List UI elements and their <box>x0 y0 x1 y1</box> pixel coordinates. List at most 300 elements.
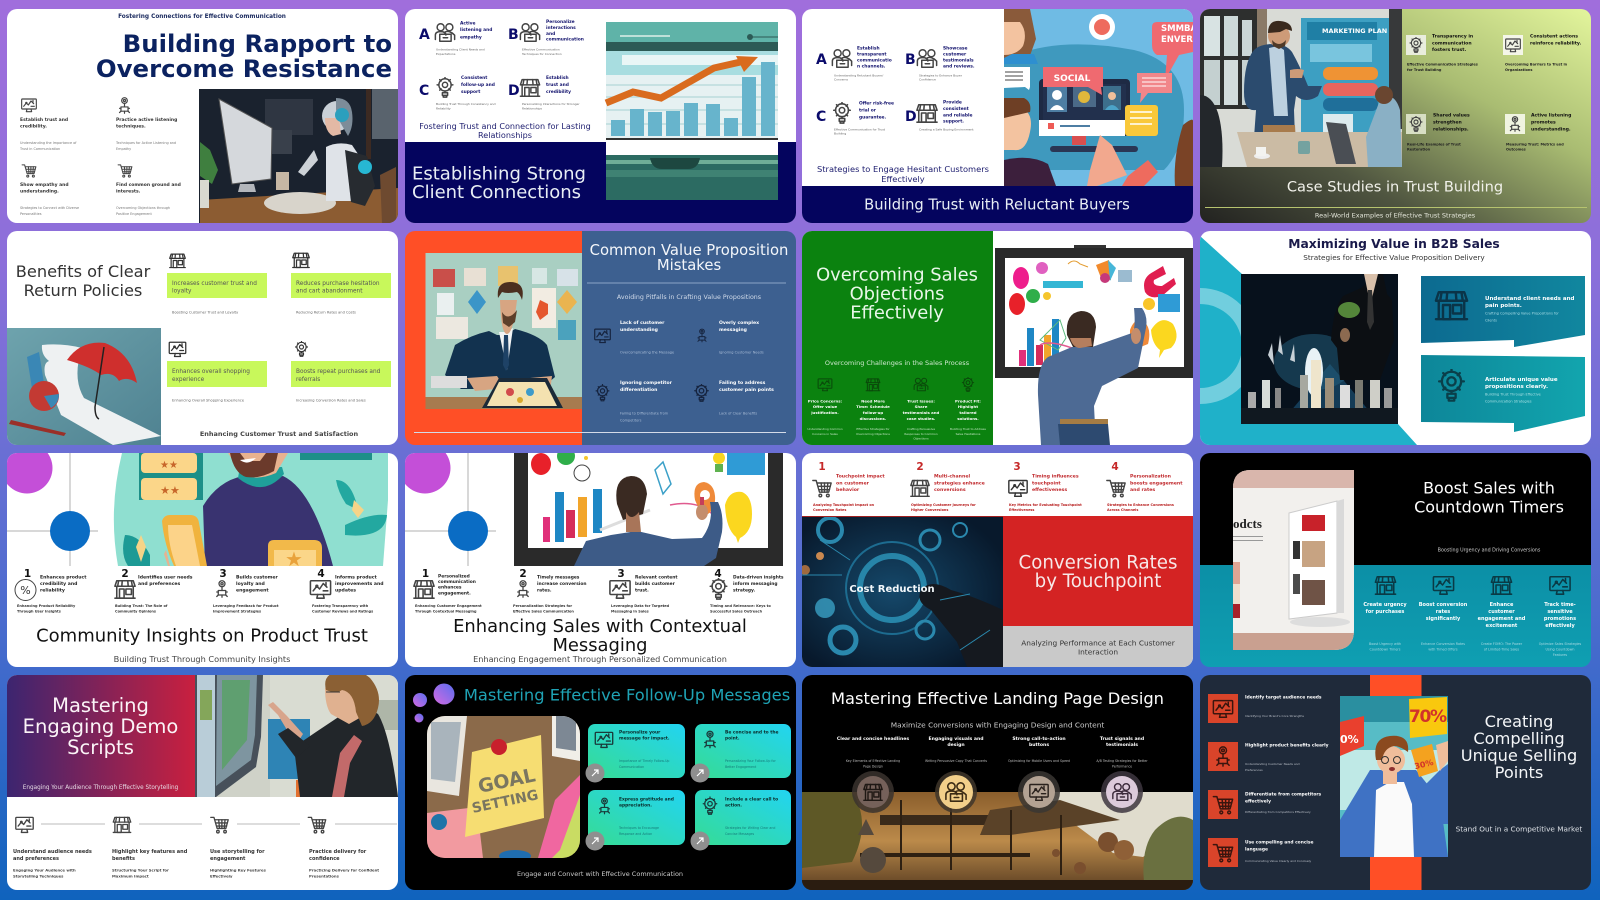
column: trust signals: Performance <box>1112 764 1132 768</box>
image: goal setting note on cork board: SETTING <box>471 787 540 817</box>
image: goal setting note on cork board: GOAL <box>476 764 537 798</box>
icon: people <box>914 378 928 391</box>
item 4: Successful Sales Outreach <box>710 610 763 614</box>
item C: C <box>816 109 826 125</box>
item: trust and loyalty: loyalty <box>172 288 192 294</box>
image: man at whiteboard <box>514 447 783 566</box>
item: understand client needs: Clients <box>1485 318 1497 322</box>
item 2: Higher Conversions <box>911 508 948 512</box>
item: active listening <box>1505 112 1571 152</box>
item: key features: benefits <box>112 856 135 862</box>
item: price concerns: Understanding Common <box>807 427 843 431</box>
item 3: 3 <box>617 568 625 580</box>
item: more time: Need More <box>861 398 885 404</box>
title: Objections <box>850 284 944 304</box>
item: key features: Maximum Impact <box>112 874 149 878</box>
item: show empathy: Show empathy and <box>20 182 69 188</box>
item 1: Analyzing Touchpoint Impact on <box>813 503 875 507</box>
item: price concerns <box>807 379 843 436</box>
icon: cart <box>211 817 228 833</box>
item D <box>508 75 580 110</box>
item C: trial or <box>859 108 877 114</box>
title: Effectively <box>850 302 944 324</box>
item 4: Timing and Relevance: Keys to <box>710 604 771 608</box>
item 3: loyalty and <box>236 581 265 587</box>
title: Return Policies <box>24 281 142 300</box>
item: conversion: Enhance Conversion Rates <box>1421 642 1465 646</box>
icon: gear <box>596 384 609 401</box>
item: reduces hesitation <box>291 253 391 314</box>
item: product fit: Product Fit: <box>955 398 981 404</box>
item 1: 1 <box>818 461 826 473</box>
item: urgency: Create urgency <box>1363 602 1407 608</box>
icon: monitor <box>16 817 33 832</box>
item 2: 2 <box>916 461 924 473</box>
item: understand client needs: Understand client needs and <box>1485 296 1574 302</box>
item A: communicatio <box>857 58 892 64</box>
item: trust issues: Trust Issues: <box>907 398 935 404</box>
item: promotions <box>1539 577 1582 657</box>
image: customer with rating cards <box>114 453 388 571</box>
item: customer understanding: Overcomplicating the Message <box>620 350 674 354</box>
item: understand client needs <box>1421 276 1585 347</box>
title: Building Rapport to <box>123 29 392 58</box>
item A: Understanding Reluctant Buyers' <box>834 74 884 78</box>
item: delivery <box>308 817 397 878</box>
icon: cart <box>118 165 132 177</box>
icon: store <box>170 254 185 268</box>
icon: store badge <box>852 771 894 813</box>
item: reduces hesitation: Reduces purchase hesitation <box>296 281 380 287</box>
item 2: Identifies user needs <box>138 574 193 580</box>
item: trust issues <box>903 378 940 440</box>
item 3: effectiveness <box>1032 487 1067 493</box>
icon: pin <box>600 798 609 814</box>
item B: Showcase <box>943 46 968 52</box>
subtitle: Enhancing Engagement Through Personalized Communication <box>473 654 727 664</box>
item: price concerns: Offer value <box>813 404 837 409</box>
title: Establishing Strong <box>412 164 586 184</box>
icon: store <box>293 253 309 268</box>
title: Compelling <box>1473 729 1565 748</box>
subtitle: Interaction <box>1078 648 1118 656</box>
item: storytelling: Highlighting Key Features <box>210 868 267 872</box>
item: establish trust: credibility. <box>20 124 47 130</box>
panel: Creating Compelling Unique Selling Points <box>1200 675 1591 890</box>
item 1: behavior <box>836 487 860 493</box>
item: customer understanding <box>595 320 674 354</box>
item: trust issues: Share <box>915 404 928 409</box>
item D: support. <box>943 118 964 124</box>
item B <box>905 46 975 82</box>
item: trust and loyalty: Increases customer trust and <box>172 281 257 287</box>
item: consistent actions <box>1503 34 1581 72</box>
card: call to action: Strategies for Writing Clear and <box>725 826 775 830</box>
icon: store <box>414 581 434 598</box>
title: Common Value Proposition <box>590 242 788 259</box>
item: price concerns: Concerns in Sales <box>812 432 838 436</box>
item D: credibility <box>546 89 571 95</box>
title: Enhancing Sales with Contextual <box>453 616 747 637</box>
item: trust issues: Objections <box>913 436 929 440</box>
image: social media illustration: ENVER <box>1161 35 1193 45</box>
item: transparency: for Trust Building <box>1407 68 1442 72</box>
item: articulate unique value: propositions clearly. <box>1485 384 1548 390</box>
item: product fit: Sales Hesitations <box>956 432 981 436</box>
title: Conversion Rates <box>1019 552 1177 574</box>
item 3: Key Metrics for Evaluating Touchpoint <box>1009 503 1082 507</box>
item: consistent actions: Consistent actions <box>1530 34 1578 40</box>
panel: Enhancing Sales with Contextual Messaging <box>400 442 796 667</box>
item: differentiation: Ignoring competitor <box>620 380 673 386</box>
item 1: Enhancing Customer Engagement <box>415 604 482 608</box>
card: gratitude: Express gratitude and <box>619 796 674 802</box>
arrow button <box>586 764 604 782</box>
item: target audience: Identify target audience needs <box>1245 694 1322 700</box>
item: audience needs <box>13 817 105 878</box>
column: headlines: Clear and concise headlines <box>837 736 909 742</box>
item 3: trust. <box>635 588 649 594</box>
card: personalize: Communication <box>619 765 644 769</box>
item: more time: Overcoming Objections <box>856 432 890 436</box>
item: common ground: interests. <box>116 188 141 194</box>
icon: pin <box>217 581 227 597</box>
item: differentiate <box>1208 790 1322 819</box>
item: compelling language: Use compelling and concise <box>1245 840 1314 846</box>
card: gratitude: Techniques to Encourage <box>618 826 659 830</box>
item: differentiation: Failing to Differentiate from <box>620 412 669 416</box>
item: active listening: Active listening <box>1531 112 1571 118</box>
item: reduces hesitation: Reducing Return Rates and Costs <box>296 310 356 314</box>
item 4: Strategies to Enhance Conversions <box>1107 503 1174 507</box>
item: engagement: engagement and <box>1478 616 1526 622</box>
item: show empathy: Personalities <box>20 212 42 216</box>
card: personalize: Importance of Timely Follow-Up <box>619 759 669 763</box>
subtitle: Maximize Conversions with Engaging Design and Content <box>891 720 1104 730</box>
column: trust signals <box>1096 736 1148 813</box>
subtitle: Fostering Connections for Effective Communication <box>118 14 286 20</box>
item: urgency <box>1363 577 1407 652</box>
column: visuals <box>925 736 987 813</box>
card: personalize <box>586 724 685 782</box>
item B: Confidence <box>919 78 936 82</box>
item: storytelling: Effectively <box>210 874 233 878</box>
item: complex messaging: messaging <box>719 327 747 333</box>
item B: Techniques for Connection <box>521 52 562 56</box>
item: complex messaging: Overly complex <box>719 320 759 326</box>
icon: cart <box>22 165 36 177</box>
item C: Reliability <box>436 106 451 110</box>
item 1: Through User Insights <box>17 610 61 614</box>
icon: monitor <box>1433 577 1454 594</box>
item 3: Relevant content <box>635 574 677 580</box>
item: articulate unique value <box>1421 355 1585 432</box>
card: concise <box>690 724 791 782</box>
icon: store <box>520 80 540 96</box>
title: Case Studies in Trust Building <box>1287 178 1503 196</box>
item: customer understanding: understanding <box>620 327 658 333</box>
item: complex messaging <box>698 320 764 354</box>
item 3: Messaging in Sales <box>611 610 649 614</box>
card: gratitude: appreciation. <box>619 802 652 808</box>
item 1: enhances <box>438 584 462 590</box>
card: concise: Personalizing Your Follow-Up for <box>725 759 776 763</box>
item 1 <box>813 461 885 512</box>
item: shared values: Restoration <box>1407 148 1431 152</box>
item A: transparent <box>857 52 886 58</box>
icon: monitor <box>1506 39 1520 52</box>
item: product benefits: Understanding Customer Needs and <box>1245 762 1300 766</box>
item C: follow-up and <box>461 82 495 88</box>
icon: gear <box>1410 116 1422 131</box>
item: more time: follow-up <box>863 410 883 415</box>
panel: Building Trust with Reluctant Buyers <box>802 9 1198 223</box>
arrow button <box>690 832 710 850</box>
item 1: Personalized <box>438 574 470 580</box>
item: product benefits <box>1208 742 1329 772</box>
icon: gear <box>962 377 974 391</box>
card: call to action: Concise Messages <box>725 832 754 836</box>
item: active listening: understanding. <box>1531 126 1571 132</box>
footer caption: Engage and Convert with Effective Communication <box>517 870 683 878</box>
image: cost reduction gears: Cost Reduction <box>849 584 935 595</box>
item B: and reviews. <box>943 64 975 70</box>
subtitle: Strategies to Engage Hesitant Customers <box>817 164 989 174</box>
card: call to action: Include a clear call to <box>725 796 778 802</box>
subtitle: Relationships <box>478 130 532 140</box>
column: trust signals: A/B Testing Strategies for Better <box>1096 759 1148 763</box>
column: call to action: Optimizing for Mobile Users and Speed <box>1008 759 1070 763</box>
item B: Strategies to Enhance Buyer <box>919 74 963 78</box>
item C <box>816 100 894 136</box>
card: concise: Be concise and to the <box>725 730 778 736</box>
item D: Creating a Safe Buying Environment <box>919 128 974 132</box>
arrow button <box>586 832 604 850</box>
item: delivery: Presentations <box>309 874 340 878</box>
item: understand client needs: Crafting Compelling Value Propositions for <box>1485 312 1559 316</box>
image: presenter with marketing plan poster: MARKETING PLAN <box>1322 27 1387 35</box>
item D: D <box>905 109 917 125</box>
icon: monitor <box>1550 577 1570 594</box>
image: excited man with discount tags: 70% <box>1409 707 1447 727</box>
item A: Establish <box>857 46 880 52</box>
subtitle: Enhancing Customer Trust and Satisfaction <box>200 430 359 438</box>
item: establish trust: Trust in Communication <box>19 147 60 151</box>
title: Mastering Effective Follow-Up Messages <box>464 686 790 704</box>
icon: monitor badge <box>1018 771 1060 813</box>
panel: Boost Sales with Countdown Timers <box>1200 453 1591 667</box>
item: conversion: rates <box>1436 609 1450 615</box>
item B: and <box>546 31 555 37</box>
item: compelling language <box>1208 838 1314 867</box>
item: promotions: sensitive <box>1547 609 1573 615</box>
item A: listening and <box>460 27 492 33</box>
item: price concerns: Price Concerns: <box>808 398 843 404</box>
item: trust issues: testimonials and <box>903 410 940 415</box>
item 2 <box>115 568 193 614</box>
item: show empathy: understanding. <box>20 188 59 194</box>
panel: Community Insights on Product Trust <box>2 442 398 667</box>
column: call to action: Strong call-to-action <box>1012 736 1066 742</box>
card: call to action <box>690 790 791 850</box>
item B: customer <box>943 52 967 58</box>
title: Benefits of Clear <box>16 262 151 281</box>
item: trust issues: case studies. <box>907 416 936 421</box>
item 4: Informs product <box>335 574 378 580</box>
icon: gear <box>834 102 850 123</box>
item: transparency: Effective Communication Strategies <box>1407 62 1478 66</box>
item: storytelling <box>210 817 300 878</box>
item: transparency: Transparency in <box>1432 34 1473 40</box>
item: product benefits: Highlight product benefits clearly <box>1245 742 1329 748</box>
item C: Effective Communication for Trust <box>834 128 886 132</box>
item 3 <box>610 568 677 614</box>
item: repeat purchases: referrals <box>296 377 320 383</box>
icon: hand <box>705 731 715 748</box>
item 4 <box>1107 461 1183 512</box>
title: Building Trust with Reluctant Buyers <box>864 196 1130 214</box>
item: product fit: tailored <box>959 410 977 415</box>
item: more time <box>856 379 890 436</box>
item 2: Optimizing Customer Journeys for <box>911 503 976 507</box>
item: audience needs: and preferences <box>13 856 59 862</box>
item: product fit: Highlight <box>958 404 978 409</box>
item 4: inform messaging <box>733 581 778 587</box>
icon: monitor <box>610 581 630 598</box>
icon: monitor <box>595 732 613 747</box>
item 1: communication <box>438 579 476 585</box>
column: call to action <box>1008 736 1070 813</box>
item: price concerns: justification. <box>810 410 839 415</box>
item 1: reliability <box>40 588 65 594</box>
item 3: builds customer <box>635 581 676 587</box>
item 2: Timely messages <box>537 574 580 580</box>
column: headlines: Key Elements of Effective Landing <box>846 759 900 763</box>
title: Client Connections <box>412 182 581 203</box>
card: gratitude: Response and Action <box>619 832 652 836</box>
item 2: Community Opinions <box>115 610 156 614</box>
item A: Understanding Client Needs and <box>436 48 485 52</box>
subtitle: Boosting Urgency and Driving Conversions <box>1438 548 1541 554</box>
item: active listening: promotes <box>1531 120 1556 126</box>
item: repeat purchases <box>291 341 391 402</box>
item C: Building Trust Through Consistency and <box>436 102 496 106</box>
item A: Active <box>460 20 475 26</box>
icon: monitor <box>169 342 186 356</box>
icon: monitor <box>1009 480 1027 496</box>
card: concise: point. <box>725 736 740 742</box>
item 2: Personalization Strategies for <box>513 604 572 608</box>
image: social media illustration: SOCIAL <box>1054 74 1091 84</box>
title: Overcome Resistance <box>96 54 392 83</box>
item 4 <box>710 568 784 614</box>
card: personalize: Personalize your <box>619 730 661 736</box>
item B: Effective Communication <box>522 48 560 52</box>
image: growth bar chart with arrow <box>606 22 778 200</box>
item 2: conversions <box>934 487 966 493</box>
item: compelling language: Communicating Value Clearly and Concisely <box>1245 859 1311 863</box>
teal corner shape <box>1200 236 1417 445</box>
column: visuals: Engaging visuals and <box>928 736 984 742</box>
icon: people <box>917 50 937 67</box>
item 3: Leveraging Data for Targeted <box>611 604 670 608</box>
panel: Case Studies in Trust Building <box>1200 9 1591 223</box>
icon: store <box>917 105 937 122</box>
item 1 <box>15 568 87 614</box>
icon: pin <box>120 98 129 113</box>
item: trust and loyalty: Boosting Customer Trust and Loyalty <box>172 310 239 314</box>
panel: Common Value Proposition Mistakes <box>405 231 796 445</box>
item B: testimonials <box>943 58 974 64</box>
item: conversion: with Timed Offers <box>1428 648 1458 652</box>
item: consistent actions: reinforce reliability. <box>1530 40 1581 46</box>
item: active listening: Practice active listening <box>116 117 177 123</box>
item: promotions: Track time- <box>1544 602 1576 608</box>
title: Mastering Effective Landing Page Design <box>831 689 1164 708</box>
item: audience needs: Storytelling Techniques <box>13 874 64 878</box>
item 2: 2 <box>519 568 527 580</box>
icon: pin <box>698 329 706 342</box>
image: social media illustration <box>1004 9 1198 186</box>
item: transparency: communication <box>1432 40 1472 46</box>
item: urgency: Boost Urgency with <box>1369 642 1401 646</box>
item 1: on customer <box>836 480 870 486</box>
item 4: improvements and <box>335 581 384 587</box>
item: key features: Highlight key features and <box>112 849 188 855</box>
item 4: boosts engagement <box>1130 480 1183 486</box>
icon: store <box>1491 577 1512 594</box>
subtitle: Analyzing Performance at Each Customer <box>1021 638 1176 648</box>
title: Countdown Timers <box>1414 498 1564 516</box>
image: product shelf display <box>1233 470 1354 650</box>
image: presenter with marketing plan poster <box>1200 9 1402 167</box>
item 1: Enhancing Product Reliability <box>17 604 76 608</box>
icon: monitor <box>595 329 610 343</box>
column: headlines <box>837 736 909 813</box>
icon: store <box>115 581 135 598</box>
item: shared values: strengthen <box>1433 120 1462 126</box>
image: robot artist at desk <box>199 89 398 223</box>
card: gratitude <box>586 790 685 850</box>
item: active listening: Techniques for Active Listening and <box>115 141 176 145</box>
item: engagement: Enhance <box>1490 602 1514 608</box>
item: conversion: significantly <box>1426 616 1461 622</box>
icon: pin <box>1217 747 1229 766</box>
item 1: 1 <box>422 568 429 580</box>
item: differentiation: Competitors <box>620 418 642 422</box>
item 4: 4 <box>1111 461 1119 473</box>
item 3 <box>213 568 279 614</box>
item: consistent actions: Organizations <box>1505 68 1533 72</box>
item 2: and preferences <box>138 581 181 587</box>
item: shared values <box>1406 112 1470 152</box>
item 4 <box>310 568 384 614</box>
panel: Mastering Effective Landing Page Design <box>802 675 1193 890</box>
item A <box>419 20 492 56</box>
item: customer understanding: Lack of customer <box>620 320 665 326</box>
title: Overcoming Sales <box>816 264 978 286</box>
item B <box>508 19 584 56</box>
subtitle: Effectively <box>881 174 925 184</box>
card: concise: Better Engagement <box>725 765 757 769</box>
item B: B <box>905 52 916 68</box>
item 2 <box>513 568 586 614</box>
item: differentiate: Differentiate from competitors <box>1245 792 1322 798</box>
item: urgency: Countdown Timers <box>1370 648 1401 652</box>
item A: Concerns <box>834 78 848 82</box>
subtitle: Overcoming Challenges in the Sales Process <box>825 359 970 367</box>
icon: store <box>1436 292 1467 319</box>
